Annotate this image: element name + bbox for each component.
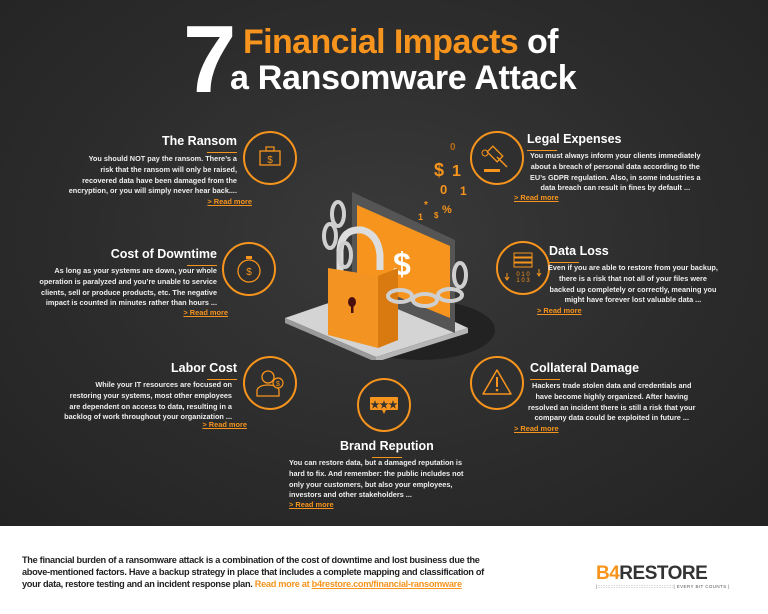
panel: data loss: Even if you are able to restore from your backup, [548, 263, 718, 272]
title [183, 6, 577, 113]
panel: the ransom [69, 131, 297, 206]
panel: the ransom: The Ransom [162, 134, 237, 148]
central illustration: locked laptop: $ [434, 211, 439, 220]
logo: |::::::::::::::::::::::::::::::::::::::::::::::| EVERY BIT COUNTS | [596, 584, 730, 589]
panel: legal expenses: > Read more [514, 193, 559, 202]
panel: collateral damage: Hackers trade stolen data and credentials and [532, 381, 691, 390]
panel: data loss: > Read more [537, 306, 582, 315]
central illustration: locked laptop: 1 [460, 184, 467, 198]
central illustration: locked laptop: % [442, 204, 452, 216]
icon: briefcase: $ [267, 155, 273, 166]
central illustration: locked laptop: 1 [452, 163, 461, 180]
panel: legal expenses: data breach can result in fines by default ... [540, 183, 690, 192]
panel: collateral damage: resolved an incident there is still a risk that your [528, 403, 695, 412]
logo: B4RESTORE [596, 563, 707, 584]
panel: data loss: there is a risk that not all of your files were [559, 274, 707, 283]
central illustration: locked laptop: 1 [418, 212, 423, 222]
panel: legal expenses: about a breach of personal data according to the [531, 162, 700, 171]
icon: warning [470, 356, 524, 410]
icon: person with coin [243, 356, 297, 410]
central illustration: locked laptop: 0 [450, 142, 456, 153]
icon: stopwatch: $ [246, 267, 252, 278]
panel: brand reputation [289, 378, 464, 509]
panel: cost of downtime: operation is paralyzed and you’re unable to service [39, 277, 217, 286]
panel: labor cost: > Read more [202, 420, 247, 429]
panel: brand reputation: Brand Repution [340, 439, 434, 453]
panel: data loss [496, 241, 718, 315]
panel: brand reputation: You can restore data, but a damaged reputation is [289, 458, 462, 467]
title: 7 [183, 6, 232, 113]
panel: brand reputation: > Read more [289, 500, 334, 509]
footer text: your data, restore testing and an incident response plan. Read more at b4restore.com/financial-ransomware [22, 579, 462, 589]
panel: brand reputation: investors and other stakeholders ... [289, 490, 412, 499]
panel: cost of downtime: As long as your systems are down, your whole [54, 266, 217, 275]
panel: legal expenses: Legal Expenses [527, 132, 622, 146]
panel: labor cost: While your IT resources are focused on [95, 380, 232, 389]
icon: rating stars [357, 378, 411, 432]
panel: data loss: Data Loss [549, 244, 609, 258]
panel: labor cost: are dependent on access to data, resulting in a [69, 402, 232, 411]
icon: rating stars: ★★★ [371, 400, 397, 411]
icon: server [496, 241, 550, 295]
panel: data loss: might have forever lost valuable data ... [565, 295, 701, 304]
panel: data loss: backed up completely or correctly, meaning you [549, 285, 716, 294]
logo [596, 563, 730, 589]
panel: the ransom: recovered data have been damaged from the [82, 176, 237, 185]
footer text [22, 555, 484, 589]
panel: collateral damage: company data could be exploited in future ... [534, 413, 689, 422]
central illustration: locked laptop: $ [393, 246, 411, 282]
panel: brand reputation: only your customers, but also your employees, [289, 480, 452, 489]
title: a Ransomware Attack [230, 59, 576, 97]
panel: labor cost [64, 356, 297, 429]
panel: brand reputation: hard to fix. And remember: the public includes not [289, 469, 463, 478]
panel: legal expenses [470, 131, 701, 202]
panel: labor cost: restoring your systems, most other employees [70, 391, 232, 400]
panel: the ransom: You should NOT pay the ransom. There’s a [89, 154, 237, 163]
icon: person with coin: $ [276, 381, 280, 388]
panel: the ransom: > Read more [207, 197, 252, 206]
panel: collateral damage: have become highly organized. After having [535, 392, 688, 401]
icon: stopwatch [222, 242, 276, 296]
icon: server: 0 1 0 [516, 272, 530, 278]
panel: cost of downtime: impact is counted in minutes rather than hours ... [46, 298, 217, 307]
icon: server: 1 0 3 [516, 278, 530, 284]
panel: labor cost: Labor Cost [171, 361, 237, 375]
panel: cost of downtime: Cost of Downtime [111, 247, 217, 261]
footer text: above-mentioned factors. Have a backup strategy in place that includes a complete mapping and classification of [22, 567, 484, 577]
central illustration: locked laptop: 0 [440, 182, 447, 197]
panel: collateral damage [470, 356, 696, 433]
panel: cost of downtime [39, 242, 276, 317]
central illustration: locked laptop: $ [434, 160, 444, 180]
panel: the ransom: encryption, or you will simply never hear back.... [69, 186, 237, 195]
panel: cost of downtime: > Read more [183, 308, 228, 317]
panel: legal expenses: You must always inform your clients immediately [530, 151, 701, 160]
panel: legal expenses: EU’s GDPR regulation. Also, in some industries a [530, 173, 701, 182]
panel: collateral damage: > Read more [514, 424, 559, 433]
central illustration: locked laptop: * [424, 200, 428, 211]
footer text: The financial burden of a ransomware attack is a combination of the cost of downtime and lost business due the [22, 555, 480, 565]
panel: the ransom: risk that the ransom will only be raised, [100, 165, 237, 174]
icon: gavel [470, 131, 524, 185]
title: Financial Impacts of [243, 23, 558, 61]
icon: briefcase [243, 131, 297, 185]
central illustration: locked laptop [285, 142, 495, 360]
panel: labor cost: backlog of work throughout your organization ... [64, 412, 232, 421]
panel: collateral damage: Collateral Damage [530, 361, 639, 375]
panel: cost of downtime: clients, sell or produce products, etc. The negative [41, 288, 217, 297]
